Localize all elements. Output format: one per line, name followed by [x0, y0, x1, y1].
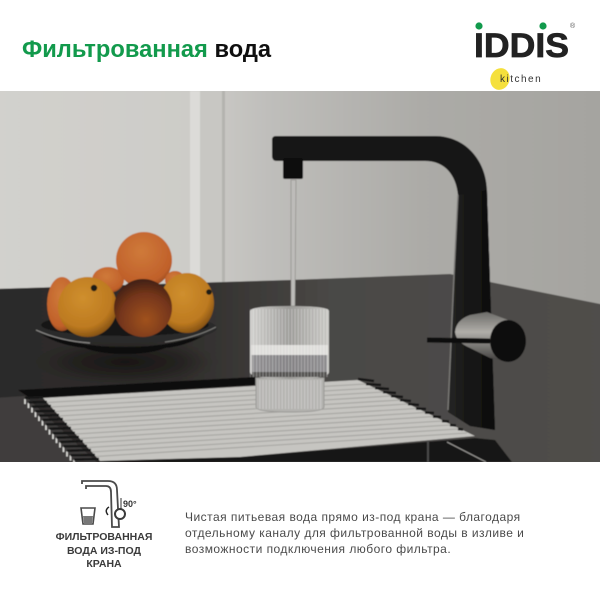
logo: IDDIS kitchen: ®	[570, 22, 576, 30]
countertop	[0, 274, 600, 470]
glass of water	[250, 306, 329, 412]
reflection under plate	[30, 338, 220, 386]
lower left counter tone	[0, 396, 100, 465]
icon caption: ФИЛЬТРОВАННАЯ	[56, 531, 152, 543]
faucet body	[272, 136, 495, 430]
description text: Чистая питьевая вода прямо из-под крана — благодаря	[185, 510, 521, 524]
description text: возможности подключения любого фильтра.	[185, 542, 451, 556]
water stream	[291, 180, 296, 306]
sink front rim	[18, 377, 255, 398]
wall	[0, 85, 600, 325]
icon: faucet with glass and 90 degree swivel	[80, 480, 137, 528]
sink basin	[100, 438, 512, 462]
logo: IDDIS kitchen	[474, 22, 576, 90]
fruit plate	[33, 313, 217, 354]
description text: отдельному каналу для фильтрованной воды в изливе и	[185, 526, 524, 540]
logo: IDDIS kitchen: IDDIS	[474, 27, 569, 65]
draining mat	[25, 379, 475, 463]
description text	[185, 510, 524, 556]
icon: faucet with glass and 90 degree swivel: 90°	[123, 499, 137, 509]
icon caption	[56, 531, 152, 570]
faucet column shading	[448, 190, 495, 430]
lever handle	[427, 312, 526, 362]
nozzle	[283, 158, 303, 179]
oranges	[47, 232, 214, 337]
photo: black kitchen faucet filling a glass	[0, 91, 600, 462]
column highlight	[448, 195, 458, 410]
title: Фильтрованная вода	[22, 37, 271, 63]
logo: IDDIS kitchen: kitchen	[500, 74, 542, 85]
icon caption: КРАНА	[86, 558, 122, 570]
wall panel groove	[190, 91, 225, 291]
icon caption: ВОДА ИЗ-ПОД	[67, 545, 141, 557]
